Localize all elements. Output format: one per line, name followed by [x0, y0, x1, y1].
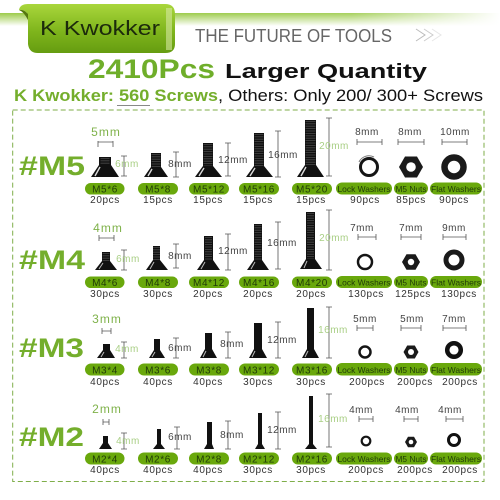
M5 pills: M5*16	[243, 184, 275, 196]
M3 counts: 40pcs	[193, 377, 223, 388]
M4 counts	[90, 289, 477, 300]
M2 counts: 30pcs	[296, 465, 326, 476]
M3 counts: 200pcs	[442, 377, 478, 388]
M2 dimension labels: 16mm	[318, 414, 348, 425]
M5 counts: 15pcs	[243, 195, 273, 206]
row: M4	[19, 210, 482, 300]
M3 counts: 40pcs	[90, 377, 120, 388]
M5 pills: M5*8	[145, 184, 171, 196]
M5 counts: 90pcs	[439, 195, 469, 206]
M5 counts: 20pcs	[90, 195, 120, 206]
M5 pills: M5*20	[296, 184, 328, 196]
M2 pills: M2*12	[243, 454, 275, 466]
M5 counts: 15pcs	[193, 195, 223, 206]
M5 pills: M5*12	[193, 184, 225, 196]
M5 counts: 90pcs	[350, 195, 380, 206]
row: M3	[19, 307, 482, 388]
M3 screws	[97, 308, 319, 358]
M5 washers and nut	[359, 156, 464, 178]
M2 dimension labels: 8mm	[220, 430, 244, 441]
M3 dimension labels: 16mm	[318, 325, 348, 336]
M5 dimension labels	[91, 118, 349, 177]
M3 counts: 30pcs	[243, 377, 273, 388]
M3 pills: M3*16	[296, 366, 328, 376]
M2 counts: 30pcs	[243, 465, 273, 476]
M5 dimension labels: 6mm	[115, 159, 139, 170]
M3 pills: M3*8	[196, 366, 222, 376]
heading: quantity	[88, 54, 428, 84]
M4 top size labels: 7mm	[399, 223, 423, 234]
M4 dimension labels: 6mm	[116, 254, 140, 265]
M4 top size labels	[350, 223, 466, 240]
M3 washers and nut	[360, 343, 461, 358]
M3 top size labels	[353, 314, 466, 331]
M2 pills: M5 Nuts	[396, 454, 426, 464]
M2 counts: 200pcs	[442, 465, 478, 476]
M4 pills: M4*16	[243, 278, 275, 289]
M2 screws	[99, 396, 317, 449]
M2 counts: 40pcs	[143, 465, 173, 476]
M4 pills: M4*20	[296, 278, 328, 289]
header gradient band	[0, 13, 500, 26]
subheading: comparison: K Kwokker: 560 Screws	[14, 86, 218, 105]
M5 top size labels	[355, 127, 470, 145]
M5 pills: M5 Nuts	[396, 184, 426, 194]
M2 top size labels: 4mm	[395, 405, 419, 416]
icon: chevrons	[416, 29, 441, 41]
M4 dimension labels: 4mm	[93, 221, 123, 235]
M4 dimension labels	[93, 210, 349, 270]
M4 pills: M4*12	[193, 278, 225, 289]
M4 pills: M4*8	[145, 278, 171, 289]
M5 counts: 15pcs	[143, 195, 173, 206]
M3 pills: Flat Washers	[431, 365, 481, 375]
logo ribbon	[19, 4, 175, 53]
subheading: comparison: , Others: Only 200/ 300+ Screws	[218, 86, 483, 105]
M5 pills: Lock Washers	[338, 184, 390, 194]
M2 dimension labels: 2mm	[92, 402, 122, 416]
M2 label: #M2	[19, 422, 84, 452]
M3 pills	[85, 363, 482, 376]
M3 dimension labels	[92, 307, 348, 358]
row: M2	[19, 394, 482, 476]
M5 top size labels: 8mm	[398, 127, 422, 138]
M5 top size labels: 8mm	[355, 127, 379, 138]
M2 dimension labels: 6mm	[168, 432, 192, 443]
M4 pills	[85, 276, 482, 289]
M3 top size labels: 5mm	[400, 314, 424, 325]
M4 dimension labels: 20mm	[319, 233, 349, 244]
M4 counts: 20pcs	[243, 289, 273, 300]
M4 counts: 130pcs	[441, 289, 477, 300]
M3 dimension labels: 6mm	[168, 343, 192, 354]
M3 label: #M3	[19, 333, 84, 363]
M5 pills: Flat Washers	[431, 184, 481, 194]
subheading: comparison	[14, 86, 483, 106]
M3 pills: M3*4	[92, 366, 118, 376]
M2 counts: 200pcs	[348, 465, 384, 476]
M4 counts: 20pcs	[193, 289, 223, 300]
M4 dimension labels: 8mm	[168, 251, 192, 262]
M2 counts: 40pcs	[193, 465, 223, 476]
M3 counts: 200pcs	[349, 377, 385, 388]
M4 washers and nut	[358, 252, 462, 270]
M3 counts	[90, 377, 478, 388]
heading: quantity: 2410Pcs	[88, 54, 215, 84]
M5 pills: M5*6	[92, 184, 118, 196]
M5 top size labels: 10mm	[440, 127, 470, 138]
M4 counts: 30pcs	[90, 289, 120, 300]
logo text: K Kwokker	[40, 18, 160, 40]
M4 pills: Flat Washers	[431, 278, 481, 288]
M4 screws	[95, 212, 322, 270]
M3 dimension labels: 4mm	[115, 344, 139, 355]
M2 pills: M2*4	[92, 454, 118, 466]
M4 dimension labels: 16mm	[267, 238, 297, 249]
M2 top size labels: 4mm	[438, 405, 462, 416]
M3 counts: 200pcs	[397, 377, 433, 388]
M2 pills: M2*16	[296, 454, 328, 466]
M5 counts: 15pcs	[296, 195, 326, 206]
M4 counts: 125pcs	[395, 289, 431, 300]
M2 pills: M2*8	[196, 454, 222, 466]
M5 dimension labels: 8mm	[168, 159, 192, 170]
M2 dimension labels	[92, 394, 348, 449]
M5 counts: 85pcs	[396, 195, 426, 206]
M2 pills: Flat Washers	[431, 454, 481, 464]
M2 pills: M2*6	[145, 454, 171, 466]
M3 top size labels: 5mm	[353, 314, 377, 325]
M4 counts: 20pcs	[296, 289, 326, 300]
M5 dimension labels: 5mm	[91, 125, 121, 139]
tagline: THE FUTURE OF TOOLS	[195, 26, 392, 46]
M3 pills: M3*12	[243, 366, 275, 376]
M3 pills: M5 Nuts	[396, 365, 426, 375]
M4 pills: Lock Washers	[338, 278, 390, 288]
M3 dimension labels: 8mm	[220, 339, 244, 350]
M3 top size labels: 7mm	[442, 314, 466, 325]
M4 counts: 130pcs	[348, 289, 384, 300]
M2 pills: Lock Washers	[338, 454, 390, 464]
M5 screws	[91, 120, 324, 177]
M3 counts: 30pcs	[296, 377, 326, 388]
M2 counts: 40pcs	[90, 465, 120, 476]
M2 counts	[90, 465, 478, 476]
M5 dimension labels: 16mm	[268, 150, 298, 161]
M2 top size labels	[349, 405, 463, 422]
M4 dimension labels: 12mm	[218, 246, 248, 257]
M3 pills: Lock Washers	[338, 365, 390, 375]
M4 pills: M4*6	[92, 278, 118, 289]
M3 dimension labels: 3mm	[92, 312, 122, 326]
M4 top size labels: 9mm	[442, 223, 466, 234]
M5 counts	[90, 195, 469, 206]
M2 pills	[85, 452, 482, 466]
M3 counts: 40pcs	[143, 377, 173, 388]
M2 counts: 200pcs	[397, 465, 433, 476]
M5 dimension labels: 20mm	[319, 141, 349, 152]
M3 dimension labels: 12mm	[267, 335, 297, 346]
dashed panel border	[13, 110, 484, 482]
heading: quantity: Larger Quantity	[225, 61, 428, 83]
M2 washers and nut	[362, 434, 460, 447]
M4 top size labels: 7mm	[350, 223, 374, 234]
row: M5	[19, 118, 482, 206]
M3 pills: M3*6	[145, 366, 171, 376]
M2 dimension labels: 12mm	[267, 425, 297, 436]
M4 label: #M4	[19, 245, 85, 275]
M5 pills	[85, 182, 482, 196]
M5 dimension labels: 12mm	[218, 155, 248, 166]
M2 dimension labels: 4mm	[116, 436, 140, 447]
M4 pills: M5 Nuts	[396, 278, 426, 288]
M5 label: #M5	[19, 151, 85, 181]
M2 top size labels: 4mm	[349, 405, 373, 416]
M4 counts: 30pcs	[143, 289, 173, 300]
